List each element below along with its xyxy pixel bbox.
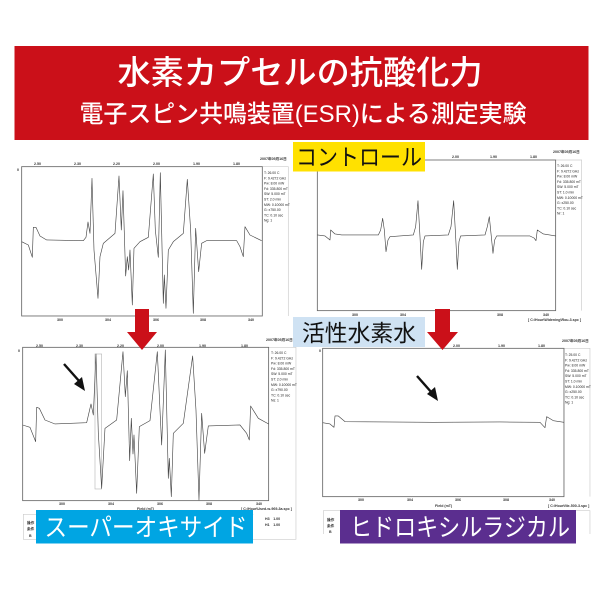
- chart: untreated ESR spectrum: 2.50: [34, 162, 41, 166]
- chart: control ESR spectrum: 340: [543, 313, 549, 317]
- subtitle: 電子スピン共鳴装置(ESR)による測定実験: [80, 101, 526, 128]
- chart: untreated ESR spectrum: ST: 2.0 min: [264, 198, 281, 202]
- chart: hydroxyl radical ESR spectrum: Field (mT): [435, 504, 453, 508]
- chart: superoxide ESR spectrum: 306: [157, 502, 163, 506]
- chart: hydroxyl radical ESR spectrum: Pw: 8.00 mW: [565, 364, 586, 368]
- chart: untreated ESR spectrum: 2.00: [153, 162, 160, 166]
- label: active hydrogen water: 活性水素水: [302, 320, 416, 346]
- chart: superoxide ESR spectrum: 304: [108, 502, 114, 506]
- chart: hydroxyl radical ESR spectrum: G: x250.00: [565, 390, 582, 394]
- chart: superoxide ESR spectrum: 1.80: [241, 344, 248, 348]
- chart: hydroxyl radical ESR spectrum: Fd: 335.800 mT: [565, 369, 589, 373]
- label: hydroxyl radical: ヒドロキシルラジカル: [350, 514, 570, 542]
- arrow: black pointer on superoxide chart: [64, 364, 85, 391]
- chart: untreated ESR spectrum: [17, 156, 290, 322]
- chart: untreated ESR spectrum: 2007年05月16日: [260, 156, 287, 161]
- chart: control ESR spectrum: [ C:\Hour\Widening\Rou-3.spc ]: [528, 318, 581, 322]
- chart: hydroxyl radical ESR spectrum: [319, 338, 591, 534]
- chart: untreated ESR spectrum: G: x750.00: [264, 208, 281, 212]
- arrow: black pointer on hydroxyl chart: [417, 376, 438, 401]
- chart: hydroxyl radical ESR spectrum: 2.00: [453, 344, 460, 348]
- chart: superoxide ESR spectrum: H1 1.00: [265, 523, 280, 527]
- chart: superoxide ESR spectrum: 340: [256, 502, 262, 506]
- chart: untreated ESR spectrum: 340: [248, 318, 254, 322]
- chart: control ESR spectrum: G: x250.00: [557, 201, 574, 205]
- chart: control ESR spectrum: Fd: 335.800 mT: [557, 180, 581, 184]
- chart: control ESR spectrum: ST: 1.0 min: [557, 190, 574, 194]
- chart: superoxide ESR spectrum: F: 9.4272 GHz: [271, 356, 293, 360]
- chart: superoxide ESR spectrum: Field (mT): [137, 507, 155, 511]
- chart: superoxide ESR spectrum: G: x790.00: [271, 388, 288, 392]
- chart: untreated ESR spectrum: 306: [153, 318, 159, 322]
- chart: superoxide ESR spectrum: 300: [59, 502, 65, 506]
- chart: control ESR spectrum: 1.90: [490, 155, 497, 159]
- chart: hydroxyl radical ESR spectrum: F: 9.4272 GHz: [565, 358, 587, 362]
- chart: hydroxyl radical ESR spectrum: 条件: [326, 523, 335, 528]
- chart: hydroxyl radical ESR spectrum: 340: [549, 498, 555, 502]
- chart: superoxide ESR spectrum: 2007年05月16日: [266, 337, 293, 342]
- chart: hydroxyl radical ESR spectrum: T: 25.00 C: [565, 353, 581, 357]
- chart: control ESR spectrum: SW: 5.000 mT: [557, 185, 579, 189]
- chart: hydroxyl radical ESR spectrum: 304: [407, 498, 413, 502]
- chart: untreated ESR spectrum: 1.80: [233, 162, 240, 166]
- chart: control ESR spectrum: 1.80: [530, 155, 537, 159]
- chart: superoxide ESR spectrum: 1.90: [199, 344, 206, 348]
- chart: control ESR spectrum: MW: 0.10000 mT: [557, 196, 583, 200]
- chart: hydroxyl radical ESR spectrum: 306: [455, 498, 461, 502]
- chart: control ESR spectrum: [317, 149, 583, 322]
- chart: hydroxyl radical ESR spectrum: SW: 5.000 mT: [565, 374, 587, 378]
- chart: untreated ESR spectrum: MW: 0.10000 mT: [264, 203, 290, 207]
- chart: control ESR spectrum: T: 26.00 C: [557, 164, 573, 168]
- arrow: right red down arrow: [427, 309, 458, 350]
- chart: untreated ESR spectrum: 0: [17, 168, 19, 172]
- title: 水素カプセルの抗酸化力: [118, 54, 482, 91]
- chart: superoxide ESR spectrum: 308: [206, 502, 212, 506]
- label: superoxide: スーパーオキサイド: [44, 514, 248, 542]
- chart: untreated ESR spectrum: 308: [200, 318, 206, 322]
- chart: hydroxyl radical ESR spectrum: 1.80: [538, 344, 545, 348]
- title banner: [14, 46, 588, 140]
- chart: control ESR spectrum: 308: [497, 313, 503, 317]
- chart: untreated ESR spectrum: 304: [105, 318, 111, 322]
- chart: untreated ESR spectrum: SW: 5.000 mT: [264, 192, 286, 196]
- chart: superoxide ESR spectrum: 2.30: [76, 344, 83, 348]
- chart: superoxide ESR spectrum: [ C:\Hour\Used-w-969-3a.spc ]: [241, 507, 292, 511]
- chart: hydroxyl radical ESR spectrum: Ng: 1: [565, 401, 573, 405]
- chart: control ESR spectrum: Pw: 8.00 mW: [557, 175, 578, 179]
- chart: superoxide ESR spectrum: TC: 0.10 sec: [271, 393, 291, 397]
- chart: hydroxyl radical ESR spectrum: 1.90: [498, 344, 505, 348]
- chart: hydroxyl radical ESR spectrum: 操作: [327, 517, 335, 522]
- chart: superoxide ESR spectrum: Fd: 335.800 mT: [271, 367, 295, 371]
- chart: untreated ESR spectrum: 2.20: [113, 162, 120, 166]
- chart: superoxide ESR spectrum: SW: 5.000 mT: [271, 372, 293, 376]
- chart: untreated ESR spectrum: 300: [57, 318, 63, 322]
- chart: hydroxyl radical ESR spectrum: 300: [358, 498, 364, 502]
- chart: control ESR spectrum: Nr: 1: [557, 212, 564, 216]
- chart: superoxide ESR spectrum: 2.20: [117, 344, 124, 348]
- chart: hydroxyl radical ESR spectrum: TC: 0.10 sec: [565, 395, 585, 399]
- chart: superoxide ESR spectrum: 0: [18, 349, 20, 353]
- chart: superoxide ESR spectrum: T: 26.00 C: [271, 351, 287, 355]
- chart: superoxide ESR spectrum: MW: 0.10000 mT: [271, 383, 297, 387]
- chart: superoxide ESR spectrum: 条件: [26, 526, 35, 531]
- label: control: コントロール: [296, 144, 422, 170]
- chart: superoxide ESR spectrum: B: [29, 534, 32, 538]
- chart: hydroxyl radical ESR spectrum: 308: [503, 498, 509, 502]
- chart: untreated ESR spectrum: T: 26.00 C: [264, 171, 280, 175]
- chart: superoxide ESR spectrum: Pw: 8.00 mW: [271, 362, 292, 366]
- chart: untreated ESR spectrum: Ng: 1: [264, 219, 272, 223]
- chart: superoxide ESR spectrum: 2.00: [157, 344, 164, 348]
- chart: untreated ESR spectrum: 2.30: [74, 162, 81, 166]
- chart: untreated ESR spectrum: Fd: 335.800 mT: [264, 187, 288, 191]
- chart: superoxide ESR spectrum: ST: 2.0 min: [271, 378, 288, 382]
- chart: control ESR spectrum: 2007年05月16日: [553, 149, 580, 154]
- chart: superoxide ESR spectrum: Ns: 1: [271, 399, 279, 403]
- chart: superoxide ESR spectrum: H3 1.00: [265, 517, 280, 521]
- chart: hydroxyl radical ESR spectrum: ST: 1.0 min: [565, 380, 582, 384]
- arrow: left red down arrow: [127, 309, 157, 350]
- chart: superoxide ESR spectrum: [18, 337, 297, 539]
- chart: control ESR spectrum: F: 9.4272 GHz: [557, 169, 579, 173]
- chart: hydroxyl radical ESR spectrum: 2007年05月16日: [562, 338, 589, 343]
- chart: hydroxyl radical ESR spectrum: B: [329, 530, 332, 534]
- chart: superoxide ESR spectrum: 2.50: [36, 344, 43, 348]
- chart: hydroxyl radical ESR spectrum: 0: [319, 349, 321, 353]
- chart: control ESR spectrum: TC: 0.10 sec: [557, 206, 577, 210]
- chart: untreated ESR spectrum: 1.90: [193, 162, 200, 166]
- chart: control ESR spectrum: 300: [352, 313, 358, 317]
- chart: untreated ESR spectrum: Pw: 8.00 mW: [264, 182, 285, 186]
- chart: untreated ESR spectrum: TC: 0.10 sec: [264, 213, 284, 217]
- chart: hydroxyl radical ESR spectrum: [ C:\Hour\file-500-3.spc ]: [548, 504, 589, 508]
- chart: control ESR spectrum: 304: [400, 313, 406, 317]
- chart: superoxide ESR spectrum: 操作: [27, 520, 35, 525]
- chart: untreated ESR spectrum: F: 9.4272 GHz: [264, 176, 286, 180]
- chart: control ESR spectrum: 2.00: [452, 155, 459, 159]
- chart: hydroxyl radical ESR spectrum: MW: 0.10000 mT: [565, 385, 591, 389]
